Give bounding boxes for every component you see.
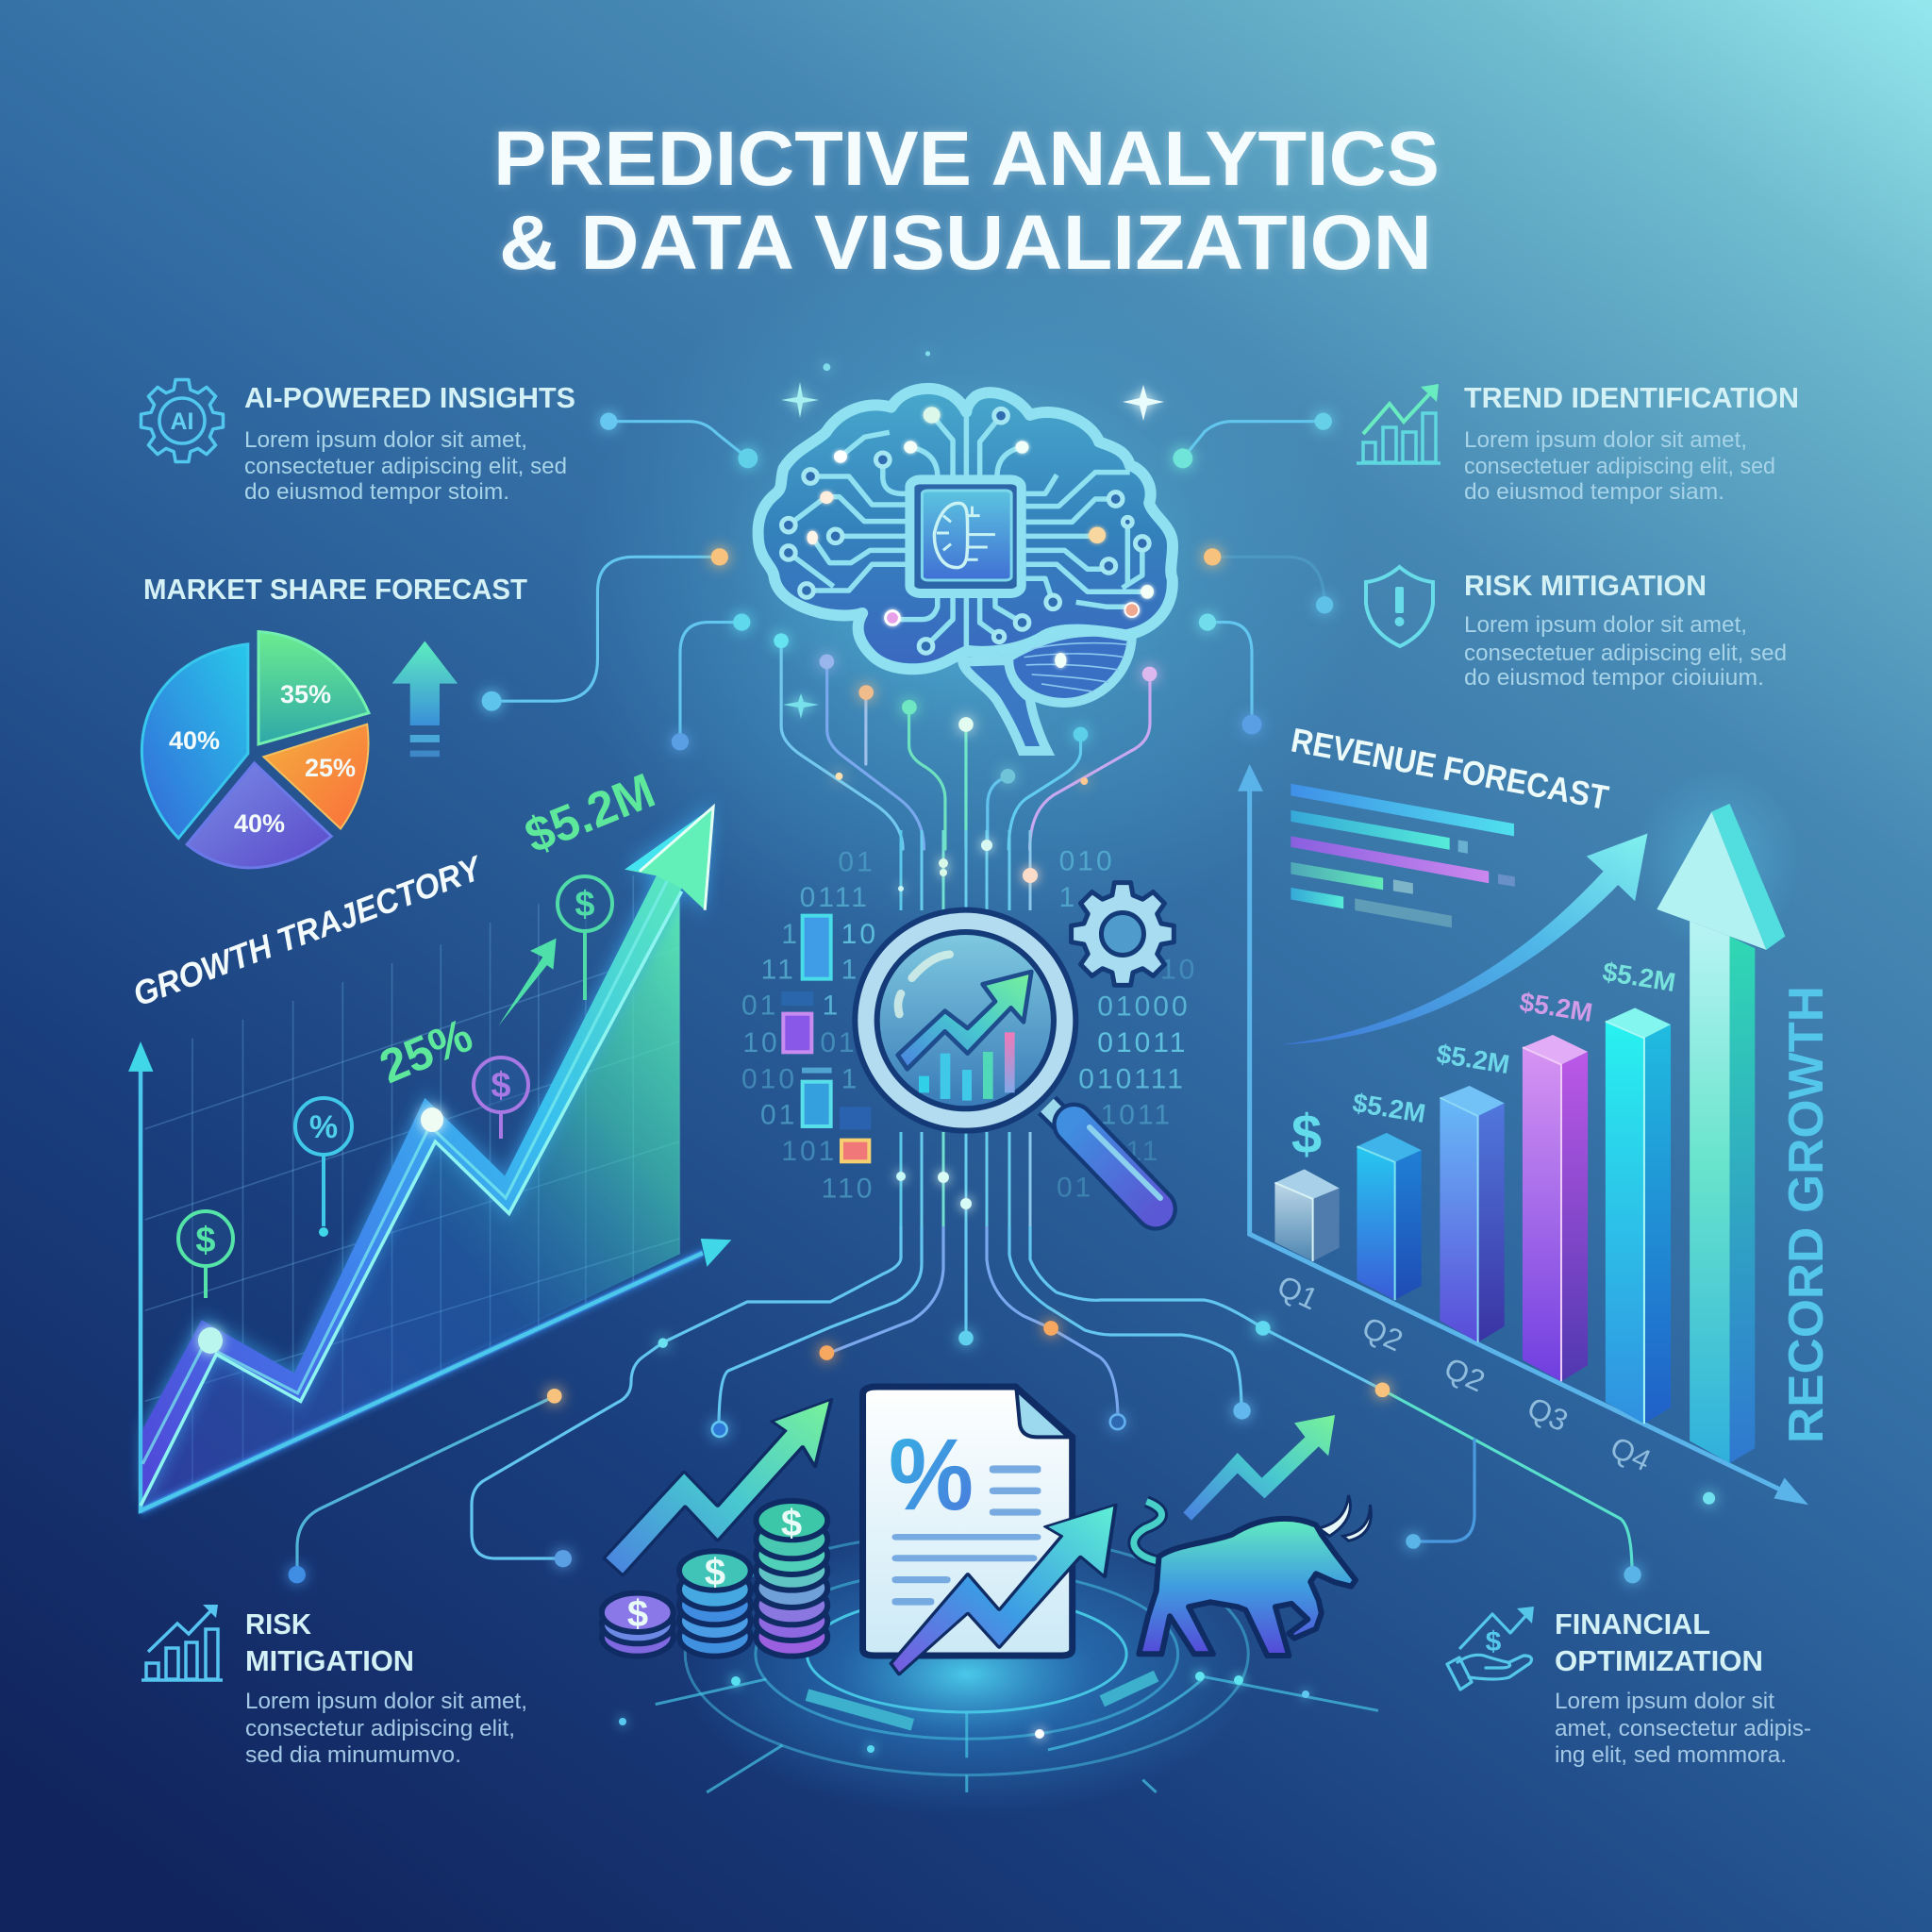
lens frame [852,908,1078,1134]
icon: trend bars [142,1605,223,1680]
heading: AI-POWERED INSIGHTS [244,381,575,414]
pie labels [169,680,356,838]
body: Lorem ipsum dolor sit amet, [1464,427,1747,453]
brain icon [725,371,1203,751]
pie chart [142,632,369,868]
binary data and blocks: 11 [1125,1136,1160,1167]
pie labels: 25% [305,754,356,782]
base sparkle points [619,1672,1309,1753]
growth trajectory label: GROWTH TRAJECTORY [127,848,489,1013]
left zigzag arrow [604,1399,831,1575]
binary data and blocks: 01000 [1097,991,1191,1023]
pin: purple dollar [474,1058,528,1139]
body: Lorem ipsum dolor sit [1555,1689,1774,1714]
cerebrum outline [758,389,1173,669]
body: consectetur adipiscing elit, [245,1716,515,1741]
bar Q3 [1523,1035,1588,1381]
gear [1072,883,1174,985]
binary data and blocks: 1 [781,919,800,950]
body [1464,612,1787,691]
stream nodes [896,840,1038,1209]
callout: risk mitigation left [142,1605,527,1768]
trend glow [142,807,713,1505]
document arrow [891,1505,1116,1674]
circuit traces [789,412,1147,651]
coin symbols: $ [781,1503,802,1544]
callout: risk mitigation right [1366,567,1787,691]
bar Q4 [1606,1008,1671,1424]
title: & DATA VISUALIZATION [499,200,1432,286]
pin: dollar: $ [195,1221,216,1260]
body [1555,1689,1811,1768]
body [244,427,567,505]
dollar sign: $ [1291,1104,1322,1165]
panel: revenue forecast chart [1238,721,1834,1505]
callout: AI-powered insights [142,379,575,505]
bar Q1 [1274,1169,1340,1261]
value labels: $5.2M [1601,957,1677,997]
base platform rings [656,1533,1378,1792]
heading [1555,1607,1763,1677]
icon: AI gear: AI [170,408,194,435]
value label: $5.2M [518,763,662,864]
cerebellum [1008,632,1132,703]
heading: RISK MITIGATION [1464,569,1707,602]
circuit connectors lower [297,1226,1632,1574]
body: Lorem ipsum dolor sit amet, [245,1689,527,1714]
body: Lorem ipsum dolor sit amet, [244,427,527,453]
value labels: $5.2M [1351,1088,1427,1128]
heading: TREND IDENTIFICATION [1464,381,1799,414]
bars [1274,1008,1671,1424]
body: do eiusmod tempor cioiuium. [1464,665,1764,691]
body: do eiusmod tempor siam. [1464,479,1724,505]
stack 3 [756,1501,827,1657]
binary data and blocks: 1 [1059,882,1077,913]
binary data and blocks: 110 [822,1173,874,1204]
binary data and blocks: 1 [841,954,859,985]
pin: dollar [178,1211,233,1298]
stack 2 [679,1551,751,1657]
curved growth arrow [1281,834,1647,1044]
body: sed dia minumumvo. [245,1742,461,1768]
body: Lorem ipsum dolor sit amet, [1464,612,1747,638]
binary data and blocks: 01 [838,846,875,877]
icon: hand with dollar: $ [1486,1626,1502,1657]
quarter labels: Q1 [1273,1269,1324,1316]
pin: percent: % [309,1109,338,1145]
value labels: $5.2M [1518,987,1594,1027]
small green arrow [498,939,557,1025]
body: consectetuer adipiscing elit, sed [244,454,567,479]
binary data and blocks: 010 [1059,846,1115,877]
body [245,1689,527,1768]
coin symbols: $ [627,1593,648,1635]
body: consectetuer adipiscing elit, sed [1464,454,1775,479]
heading [245,1607,414,1677]
heading: MITIGATION [245,1644,414,1677]
quarter labels: Q3 [1523,1391,1574,1438]
lens bars [919,1032,1015,1101]
pin: purple dollar: $ [491,1066,511,1106]
brain to data lines [781,641,1150,849]
quarter labels: Q2 [1440,1351,1491,1398]
up arrow [392,641,458,757]
lens arrow [898,972,1031,1069]
glowing nodes [807,407,1154,668]
lens highlights [898,955,950,1014]
panel: growth trajectory chart [127,763,731,1510]
binary data and blocks: 1 [841,1063,859,1094]
chip [909,479,1022,593]
icon: hand with dollar [1447,1607,1534,1690]
handle [1047,1106,1160,1209]
heading: OPTIMIZATION [1555,1644,1763,1677]
percent symbol: % [889,1417,974,1531]
icon: trend [1357,384,1441,463]
value labels: $5.2M [1435,1039,1511,1079]
binary data and blocks: 01 [820,1027,858,1058]
pin: green dollar [558,876,612,1000]
connector nodes [289,351,1715,1583]
title: PREDICTIVE ANALYTICS [493,116,1440,202]
value labels [1351,957,1677,1128]
binary data and blocks: 1011 [1101,1100,1173,1131]
binary data and blocks: 101 [781,1136,837,1167]
pie labels: 40% [169,726,220,755]
document [863,1387,1073,1656]
axes [1238,764,1808,1505]
heading: FINANCIAL [1555,1607,1710,1641]
body: ing elit, sed mommora. [1555,1742,1787,1768]
circuit connectors upper [491,422,1324,741]
chart nodes [198,1108,443,1354]
pie labels: 40% [234,809,285,838]
chart grid [144,875,679,1486]
body: do eiusmod tempor stoim. [244,479,509,505]
binary data and blocks: 01011 [1097,1027,1188,1058]
binary data and blocks: 10 [841,919,878,950]
coin symbols: $ [705,1552,725,1593]
body: amet, consectetur adipis- [1555,1716,1811,1741]
brain-line nodes [774,633,1157,785]
callout: financial optimization [1447,1607,1811,1768]
pie labels: 35% [280,680,331,708]
binary data and blocks: 01 [760,1100,797,1131]
stack 1 [602,1593,674,1657]
circuit nodes [782,408,1149,653]
icon: AI gear [142,379,223,462]
big record arrow [1633,769,1801,1463]
trend arrow [141,807,713,1506]
title [493,116,1440,286]
binary data and blocks: 010 [741,1063,797,1094]
axes [128,1041,731,1510]
heading: MARKET SHARE FORECAST [143,573,527,606]
binary data and blocks: 01 [741,991,778,1022]
quarter labels [1273,1269,1657,1477]
pin: green dollar: $ [575,885,595,924]
binary data and blocks: 10 [1160,954,1197,985]
binary data and blocks: 11 [761,954,796,985]
sparkles [781,382,1164,719]
brain stem [962,660,1047,751]
area under trend [141,885,679,1510]
document lines [892,1465,1041,1606]
legend bars [1291,784,1515,927]
binary data and blocks: 010111 [1078,1063,1186,1094]
pin: percent [295,1098,352,1237]
binary data and blocks: 01 [1057,1172,1093,1203]
binary data and blocks [741,846,1197,1204]
bar Q2 [1357,1133,1422,1300]
right zigzag arrow [1183,1415,1335,1521]
callout: trend identification [1357,381,1799,505]
revenue forecast label: REVENUE FORECAST [1289,721,1611,817]
quarter labels: Q4 [1606,1430,1657,1477]
binary data and blocks: 0111 [800,882,870,913]
heading: RISK [245,1607,312,1641]
body [1464,427,1775,505]
percent label: 25% [373,1008,479,1093]
binary data and blocks: 1 [823,991,841,1022]
icon: shield [1366,567,1433,646]
body: consectetuer adipiscing elit, sed [1464,641,1787,666]
bull [1134,1495,1371,1656]
quarter labels: Q2 [1357,1310,1408,1357]
axis glow [141,1253,703,1510]
coin stacks [602,1501,827,1657]
panel: market share pie [142,573,527,868]
bar Q2b [1440,1086,1505,1342]
binary data and blocks: 10 [742,1027,780,1058]
record growth label: RECORD GROWTH [1779,986,1834,1443]
data stream lines [901,830,1030,1226]
coin symbols [627,1503,802,1635]
magnifying glass with chart [852,883,1174,1209]
